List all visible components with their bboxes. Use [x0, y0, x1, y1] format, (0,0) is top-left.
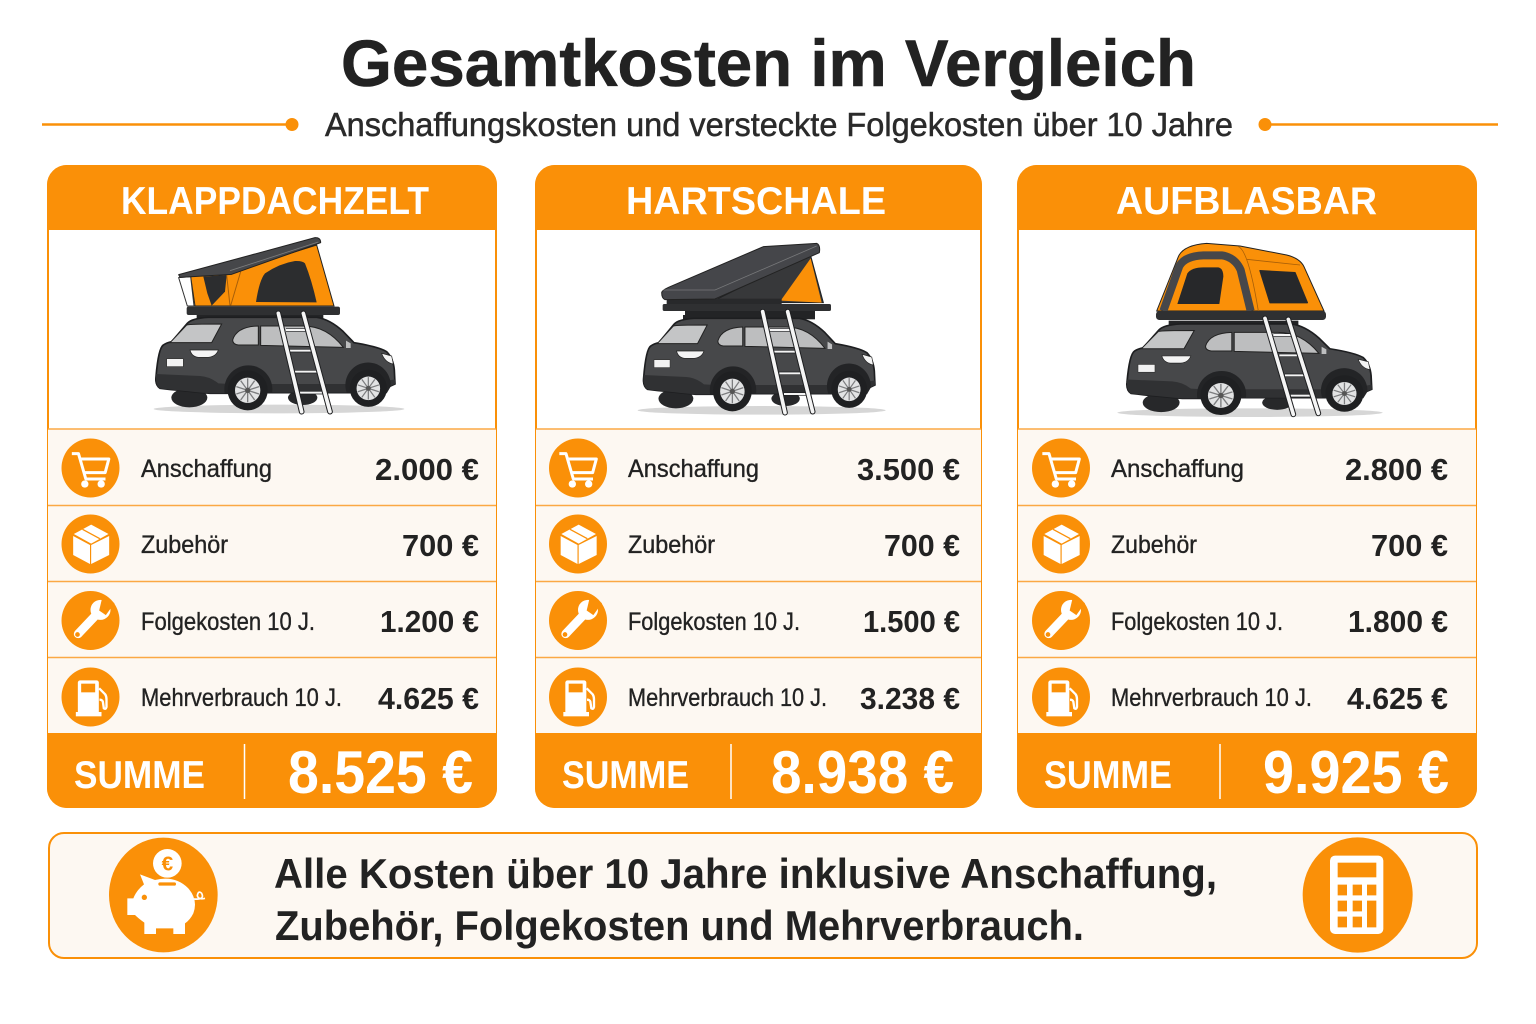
subtitle: Anschaffungskosten und versteckte Folgekosten über 10 Jahre	[325, 106, 1233, 143]
row: Mehrverbrauch: Mehrverbrauch 10 J.	[1111, 684, 1312, 712]
header: Hartschale: HARTSCHALE	[626, 180, 886, 223]
total: Hartschale: 8.938 €	[771, 739, 954, 806]
panel: Aufblasbar	[1017, 165, 1477, 808]
row: Anschaffung	[1032, 438, 1448, 498]
title: Gesamtkosten im Vergleich	[341, 26, 1196, 100]
row: Mehrverbrauch	[62, 668, 479, 726]
row: Folgekosten: Folgekosten 10 J.	[141, 608, 315, 636]
illustration: car with inflatable roof tent	[1117, 243, 1383, 417]
row: Mehrverbrauch	[549, 668, 960, 726]
row: Folgekosten: Folgekosten 10 J.	[628, 608, 800, 636]
panel: footer note	[49, 833, 1477, 958]
row: Zubehör: 700 €	[1371, 528, 1448, 563]
row: Mehrverbrauch: Mehrverbrauch 10 J.	[628, 684, 827, 712]
row: Mehrverbrauch	[1032, 668, 1448, 726]
row: Folgekosten	[62, 591, 479, 650]
row: Zubehör: Zubehör	[141, 531, 228, 559]
header: Klappdachzelt	[47, 165, 497, 230]
row: Mehrverbrauch: 3.238 €	[860, 681, 960, 716]
row: Anschaffung	[62, 438, 479, 498]
row: Folgekosten: 1.800 €	[1348, 604, 1448, 639]
row: Zubehör: 700 €	[884, 528, 960, 563]
row: Folgekosten: 1.200 €	[380, 604, 479, 639]
row: Anschaffung: 2.000 €	[375, 452, 479, 487]
row: Anschaffung: 3.500 €	[857, 452, 960, 487]
row: Folgekosten: 1.500 €	[863, 604, 960, 639]
row: Anschaffung: Anschaffung	[1111, 455, 1244, 483]
row: Zubehör	[1032, 514, 1448, 574]
total: Aufblasbar	[1017, 733, 1477, 808]
row: Folgekosten	[1032, 591, 1448, 650]
footer text line 2: Zubehör, Folgekosten und Mehrverbrauch.	[275, 902, 1084, 949]
illustration: car with folding roof tent	[154, 238, 404, 413]
row: Anschaffung: Anschaffung	[141, 455, 272, 483]
row: Zubehör: Zubehör	[1111, 531, 1197, 559]
illustration: car with hard shell roof tent	[638, 243, 886, 415]
right ornament line	[1258, 118, 1498, 131]
total: Aufblasbar: SUMME	[1044, 754, 1172, 797]
ladder	[763, 312, 813, 413]
row: Zubehör: Zubehör	[628, 531, 715, 559]
icon: piggy bank with euro coin: €	[162, 853, 174, 876]
total: Hartschale	[535, 733, 982, 808]
row: Mehrverbrauch: 4.625 €	[1347, 681, 1448, 716]
row: Folgekosten: Folgekosten 10 J.	[1111, 608, 1283, 636]
row: Mehrverbrauch: Mehrverbrauch 10 J.	[141, 684, 342, 712]
row: Anschaffung: 2.800 €	[1345, 452, 1448, 487]
header: Aufblasbar	[1017, 165, 1477, 230]
header: Hartschale	[535, 165, 982, 230]
header: Klappdachzelt: KLAPPDACHZELT	[121, 180, 429, 223]
ladder	[1265, 318, 1318, 414]
icon: calculator	[1303, 837, 1413, 953]
total: Aufblasbar: 9.925 €	[1263, 739, 1449, 806]
total: Klappdachzelt: SUMME	[74, 754, 205, 797]
total: Klappdachzelt: 8.525 €	[288, 739, 473, 806]
total: Hartschale: SUMME	[562, 754, 689, 797]
row: Folgekosten	[549, 591, 960, 650]
row: Mehrverbrauch: 4.625 €	[378, 681, 479, 716]
row: Zubehör	[549, 514, 960, 574]
row: Anschaffung: Anschaffung	[628, 455, 759, 483]
icon: piggy bank with euro coin	[109, 838, 218, 952]
total: Klappdachzelt	[47, 733, 497, 808]
left ornament line	[42, 118, 298, 131]
ladder	[278, 313, 330, 412]
header: Aufblasbar: AUFBLASBAR	[1116, 180, 1377, 223]
panel: Klappdachzelt	[47, 165, 497, 808]
row: Zubehör	[62, 514, 479, 574]
row: Zubehör: 700 €	[402, 528, 479, 563]
panel: Hartschale	[535, 165, 982, 808]
footer text line 1: Alle Kosten über 10 Jahre inklusive Anschaffung,	[274, 850, 1217, 897]
row: Anschaffung	[549, 438, 960, 498]
